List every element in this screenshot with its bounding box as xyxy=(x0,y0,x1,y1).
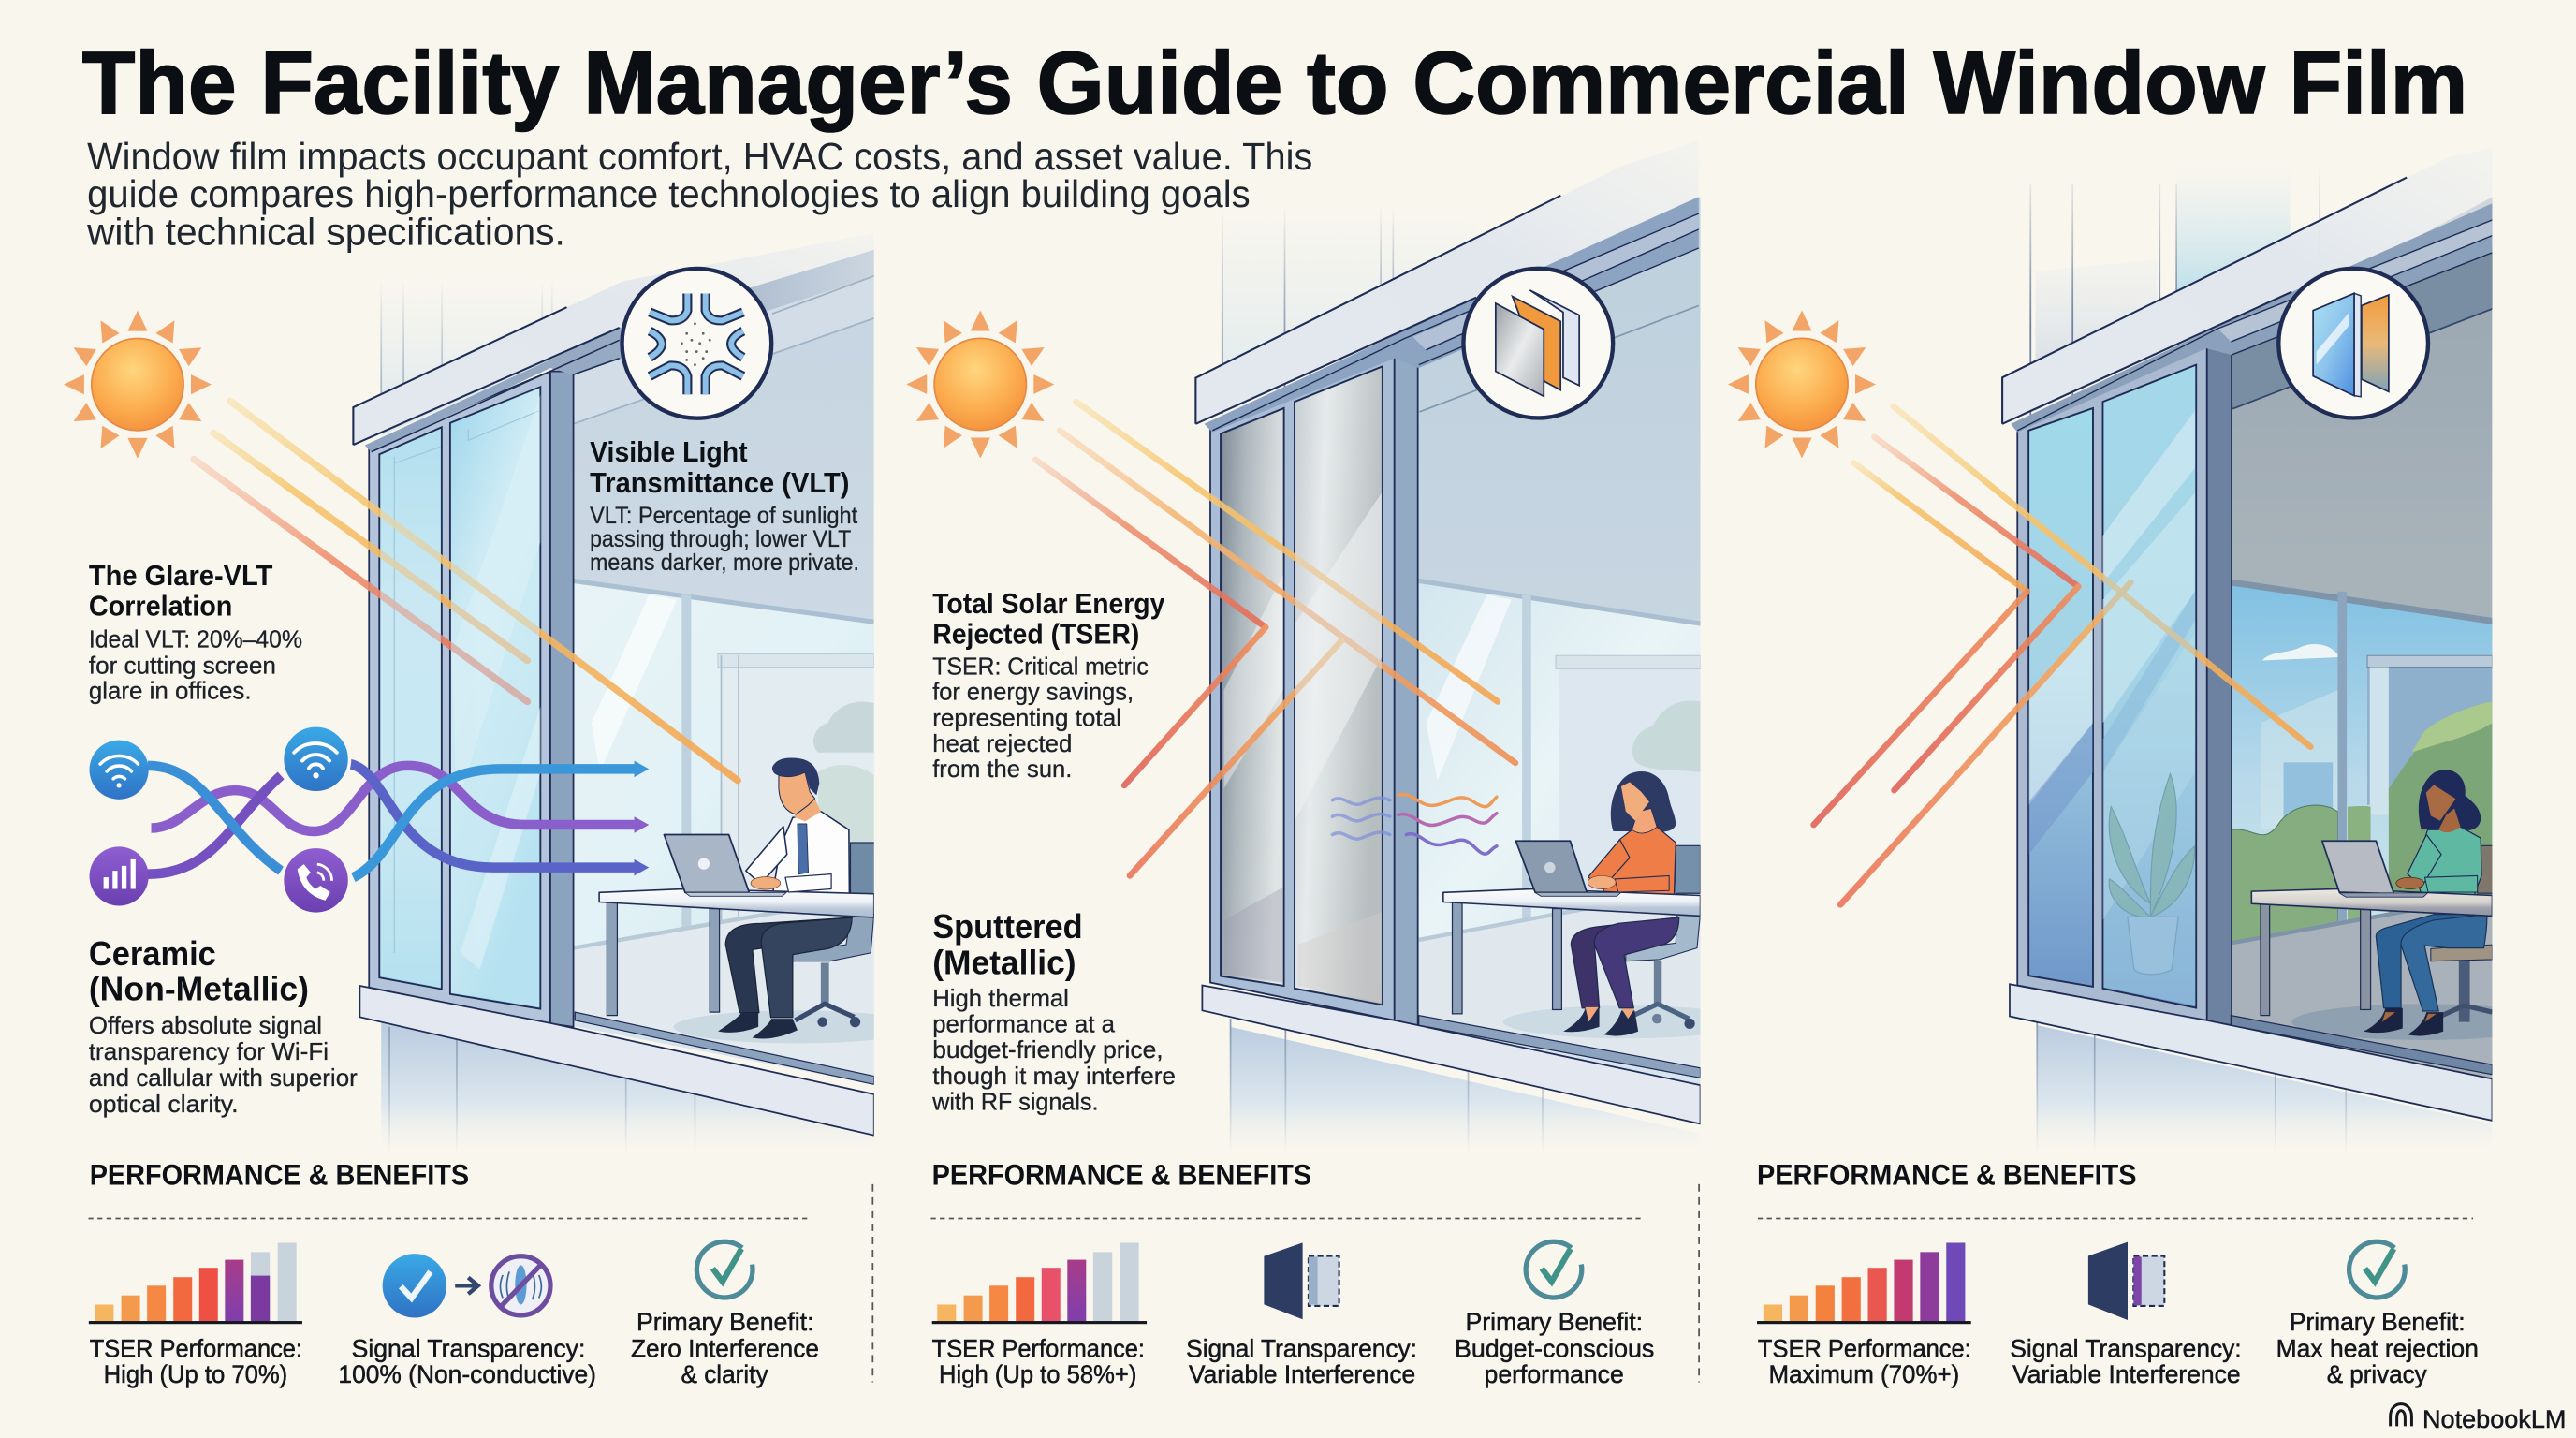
bar chart: TSER high 58 xyxy=(932,1243,1147,1324)
callout: glare-VLT correlation: The Glare-VLT xyxy=(89,559,273,592)
callout: visible light transmittance: Visible Light xyxy=(590,435,748,468)
primary benefit label: Budget-conscious xyxy=(1455,1333,1654,1362)
sun xyxy=(1728,311,1876,458)
callout: glare-VLT correlation: Ideal VLT: 20%–40% xyxy=(89,626,302,653)
solar rays passing through xyxy=(194,401,738,781)
primary benefit label: Primary Benefit: xyxy=(1466,1307,1643,1336)
primary benefit label: Max heat rejection xyxy=(2276,1333,2479,1362)
primary benefit label xyxy=(1455,1307,1654,1388)
window scene: office with metallic film xyxy=(1194,154,1701,1146)
panel: dyed hybrid film xyxy=(1728,148,2554,1388)
glazed window frame xyxy=(1210,351,1418,1025)
icon badge: ceramic nano-structure xyxy=(622,269,771,418)
icon: wifi large xyxy=(283,726,350,793)
signal paths graphic xyxy=(90,726,649,914)
text block: ceramic description xyxy=(89,934,358,1118)
TSER label xyxy=(932,1333,1145,1388)
callout: visible light transmittance xyxy=(590,435,859,576)
signal transparency label: 100% (Non-conductive) xyxy=(338,1359,596,1388)
callout: glare-VLT correlation: glare in offices. xyxy=(89,679,252,705)
text block: sputtered description: performance at a xyxy=(932,1012,1116,1038)
callout: total solar energy rejected: from the sun. xyxy=(932,756,1072,783)
TSER label: TSER Performance: xyxy=(1758,1333,1971,1362)
intro text: Window film impacts occupant comfort, HVAC costs, and asset value. This xyxy=(87,135,1312,178)
performance and benefits: ceramic xyxy=(88,1158,819,1388)
text block: ceramic description: Offers absolute signal xyxy=(89,1013,322,1039)
signal transparency label xyxy=(2010,1333,2242,1388)
TSER label: TSER Performance: xyxy=(932,1333,1145,1362)
signal transparency label: Variable Interference xyxy=(1189,1359,1415,1388)
TSER label: High (Up to 58%+) xyxy=(939,1359,1136,1388)
sill and cornice xyxy=(2002,148,2492,1155)
performance and benefits: dyed hybrid xyxy=(1757,1158,2479,1388)
solar rays mostly rejected xyxy=(1814,406,2310,904)
icon: variable interference xyxy=(1264,1242,1339,1319)
signal transparency label xyxy=(1186,1333,1417,1388)
performance and benefits: sputtered: PERFORMANCE & BENEFITS xyxy=(932,1158,1311,1192)
primary benefit label xyxy=(631,1307,819,1388)
person at laptop xyxy=(2251,770,2494,1036)
bar chart: TSER maximum xyxy=(1757,1243,1971,1324)
glass veil over rays xyxy=(380,388,539,1007)
callout: visible light transmittance: means darker, more private. xyxy=(590,550,859,576)
intro text: guide compares high-performance technologies to align building goals xyxy=(87,172,1251,215)
solar rays partly rejected xyxy=(1035,402,1515,875)
callout: visible light transmittance: Transmittance (VLT) xyxy=(590,466,849,499)
heat waves xyxy=(1332,795,1497,854)
performance and benefits: sputtered xyxy=(930,1158,1654,1388)
callout: total solar energy rejected: TSER: Critical metric xyxy=(932,653,1149,680)
performance and benefits: dyed hybrid: PERFORMANCE & BENEFITS xyxy=(1757,1158,2136,1192)
TSER label: Maximum (70%+) xyxy=(1769,1359,1959,1388)
bar chart: TSER high xyxy=(89,1243,302,1324)
signal transparency label: Signal Transparency: xyxy=(352,1333,585,1362)
primary benefit label: & privacy xyxy=(2327,1359,2427,1388)
text block: sputtered description: with RF signals. xyxy=(931,1089,1098,1115)
glass veil over rays xyxy=(1295,368,1382,1004)
text block: ceramic description: (Non-Metallic) xyxy=(89,969,309,1007)
icon: check xyxy=(696,1241,753,1298)
TSER label: TSER Performance: xyxy=(90,1333,302,1362)
intro text xyxy=(86,135,1312,253)
signal transparency label: Variable Interference xyxy=(2012,1359,2241,1388)
performance and benefits: ceramic: PERFORMANCE & BENEFITS xyxy=(90,1158,469,1192)
primary benefit label: Primary Benefit: xyxy=(637,1307,813,1336)
glass veil over rays xyxy=(2103,366,2195,1005)
callout: glare-VLT correlation: Correlation xyxy=(89,589,232,622)
icon badge: dual-reflective glass xyxy=(2278,269,2428,418)
icon badge: layered metal film xyxy=(1463,269,1613,418)
text block: sputtered description: budget-friendly price, xyxy=(932,1037,1164,1064)
primary benefit label: & clarity xyxy=(681,1359,768,1388)
icon: variable interference xyxy=(2088,1242,2164,1320)
primary benefit label: Primary Benefit: xyxy=(2290,1307,2466,1336)
icon: check xyxy=(1526,1241,1582,1298)
signal transparency label: Signal Transparency: xyxy=(1186,1333,1417,1362)
text block: sputtered description: Sputtered xyxy=(932,907,1083,946)
glazed window frame xyxy=(2017,346,2232,1025)
callout: total solar energy rejected: heat rejected xyxy=(932,731,1072,757)
text block: ceramic description: Ceramic xyxy=(89,934,216,973)
intro text: with technical specifications. xyxy=(86,210,565,253)
panel: sputtered metallic film xyxy=(906,140,1749,1388)
icon: check xyxy=(2349,1241,2405,1298)
callout: total solar energy rejected: representing total xyxy=(932,706,1121,732)
text block: ceramic description: transparency for Wi-Fi xyxy=(89,1039,329,1065)
icon: cellular bars xyxy=(90,846,149,906)
callout: visible light transmittance: VLT: Percentage of sunlight xyxy=(590,504,857,529)
person at laptop xyxy=(599,757,875,1039)
title: The Facility Manager’s Guide to Commercial Window Film xyxy=(82,34,2467,133)
callout: total solar energy rejected: for energy savings, xyxy=(932,680,1134,706)
sill and cornice xyxy=(1195,140,1701,1155)
window scene: office with ceramic film xyxy=(353,233,920,1155)
glazed window frame xyxy=(369,372,574,1027)
text block: sputtered description xyxy=(931,907,1176,1115)
text block: sputtered description: though it may interfere xyxy=(932,1064,1176,1090)
callout: glare-VLT correlation: for cutting screen xyxy=(89,653,276,680)
primary benefit label: Zero Interference xyxy=(631,1333,819,1362)
text block: sputtered description: High thermal xyxy=(932,986,1069,1012)
primary benefit label xyxy=(2276,1307,2479,1388)
text block: ceramic description: and callular with superior xyxy=(89,1065,358,1092)
signal transparency label xyxy=(338,1333,596,1388)
primary benefit label: performance xyxy=(1485,1359,1624,1388)
callout: visible light transmittance: passing through; lower VLT xyxy=(590,527,851,552)
TSER label xyxy=(90,1333,302,1388)
TSER label xyxy=(1758,1333,1971,1388)
panel: ceramic non-metallic film xyxy=(64,233,920,1388)
person at laptop xyxy=(1443,771,1701,1036)
icon: signal passes xyxy=(383,1254,550,1318)
callout: total solar energy rejected xyxy=(932,587,1164,783)
sun xyxy=(906,311,1054,458)
TSER label: High (Up to 70%) xyxy=(104,1359,287,1388)
sun xyxy=(64,311,212,459)
callout: glare-VLT correlation xyxy=(89,559,302,705)
sill and cornice xyxy=(353,233,874,1155)
plant xyxy=(2109,774,2195,975)
text block: ceramic description: optical clarity. xyxy=(89,1092,239,1118)
NotebookLM logo: NotebookLM xyxy=(2422,1404,2566,1433)
window scene: office with dark film xyxy=(2001,158,2492,1146)
text block: sputtered description: (Metallic) xyxy=(932,944,1076,982)
signal transparency label: Signal Transparency: xyxy=(2010,1333,2242,1362)
callout: total solar energy rejected: Rejected (TSER) xyxy=(932,617,1139,650)
icon: wifi xyxy=(90,741,149,800)
icon: phone xyxy=(283,846,350,914)
callout: total solar energy rejected: Total Solar Energy xyxy=(932,587,1164,620)
